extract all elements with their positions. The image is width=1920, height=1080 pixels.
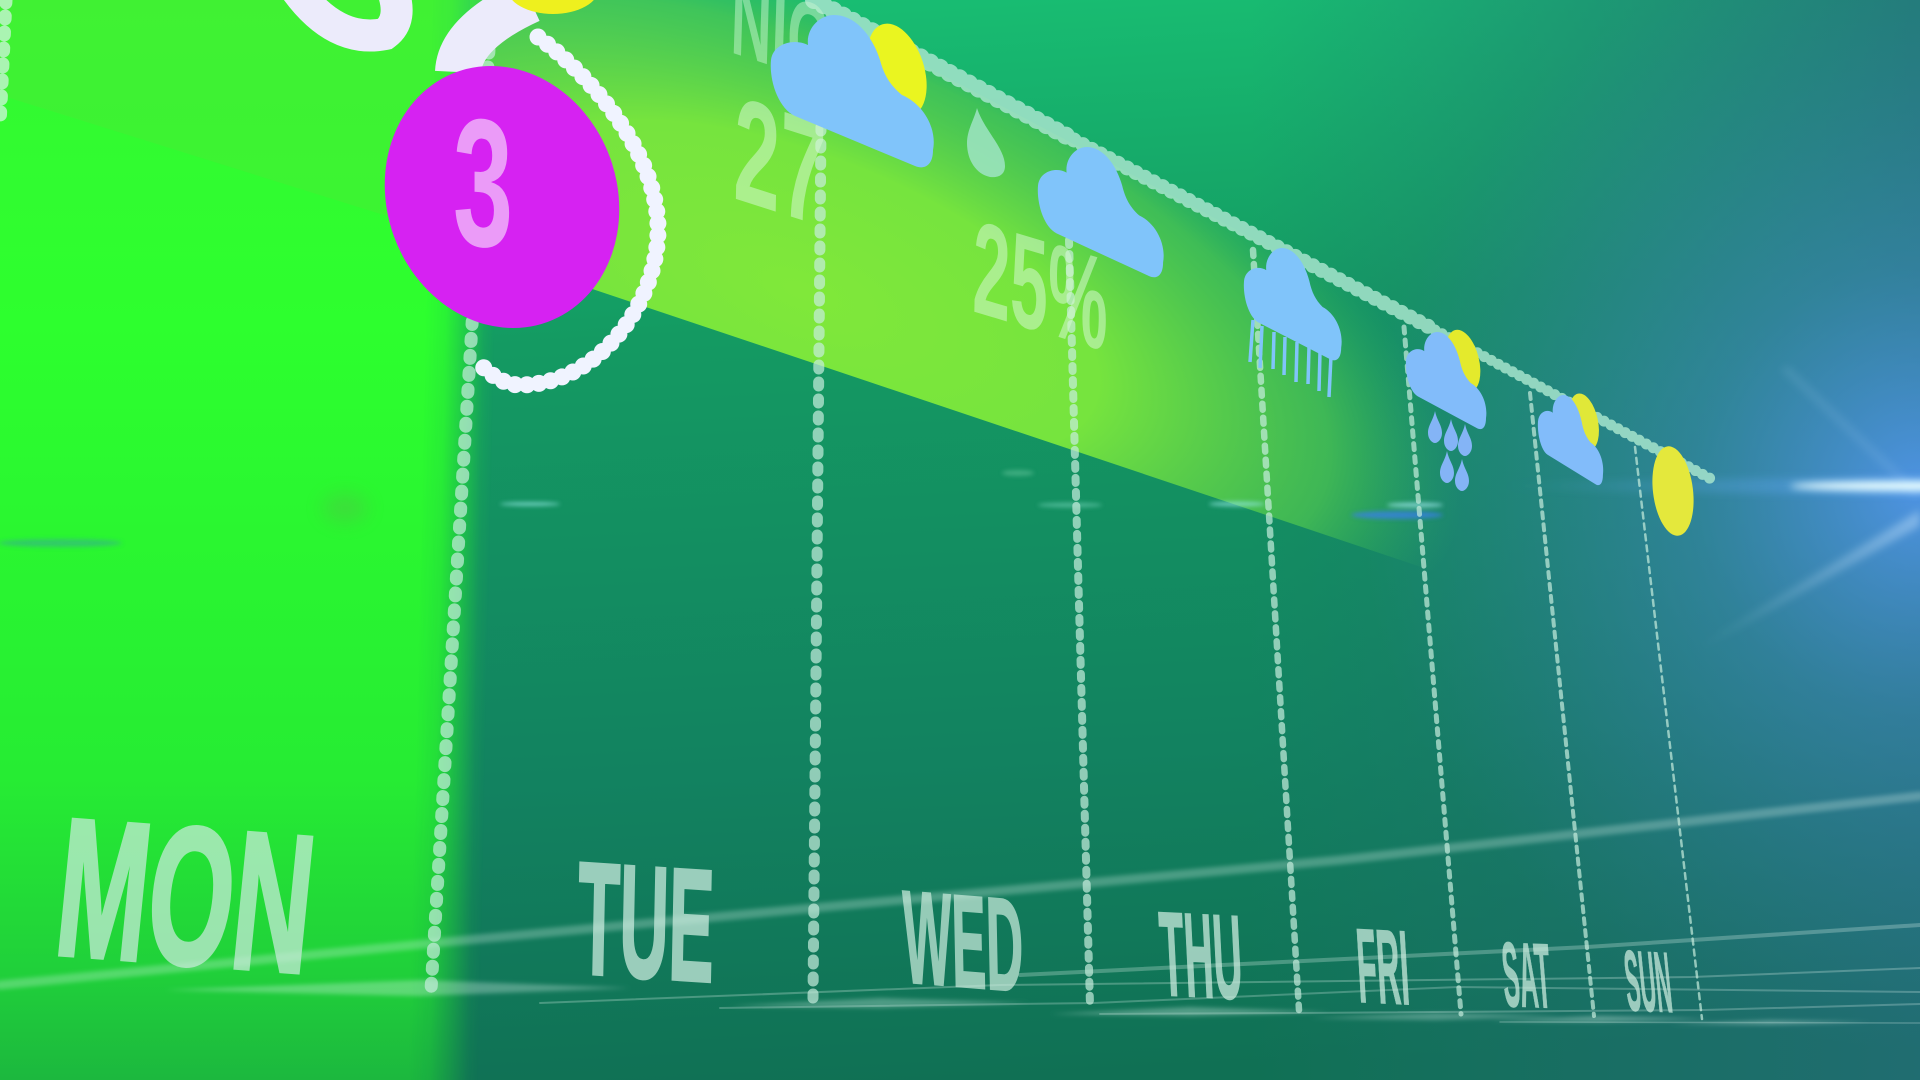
icon: Sunday sun: [1648, 444, 1698, 538]
bright green panel: [0, 0, 500, 1080]
top beaded rope: [814, 0, 1713, 480]
icon: Wednesday cloudy: [1038, 147, 1164, 277]
blurred light dashes: [0, 470, 1443, 547]
floor light streaks: [0, 796, 1920, 1023]
icon: Saturday partly cloudy: [1538, 391, 1604, 485]
beaded progress ring: [479, 37, 658, 385]
floor glints: [165, 980, 1870, 1025]
number 3: 3: [453, 79, 513, 287]
day divider lines: [431, 33, 1702, 1019]
lens flare glow: [1300, 0, 1920, 1080]
icon: Thursday rain cloud: [1244, 248, 1342, 397]
weather forecast scene: FRI: [1353, 907, 1412, 1028]
yellow-green perspective band: [470, 0, 1750, 580]
magenta number badge: [348, 33, 656, 361]
icon: small yellow shape at the top: [507, 0, 599, 14]
weather forecast scene: SUN: [1620, 933, 1676, 1031]
weather forecast scene: TUE: [576, 828, 716, 1016]
white number ribbons at the top: [295, 0, 530, 72]
weather forecast scene: THU: [1157, 887, 1245, 1025]
weather forecast scene: WED: [902, 863, 1025, 1021]
left edge beaded line: [0, 0, 6, 125]
blurred haze spot: [323, 494, 367, 522]
day label: MON: MON: [48, 777, 324, 1015]
humidity value 25%: 25%: [971, 192, 1109, 380]
weather forecast scene: SAT: [1498, 923, 1555, 1028]
icon: Friday showers: [1406, 326, 1486, 491]
temperature value 27: 27: [732, 65, 828, 260]
icon: Tuesday partly cloudy: [771, 15, 938, 167]
icon: humidity drop: [967, 108, 1005, 177]
